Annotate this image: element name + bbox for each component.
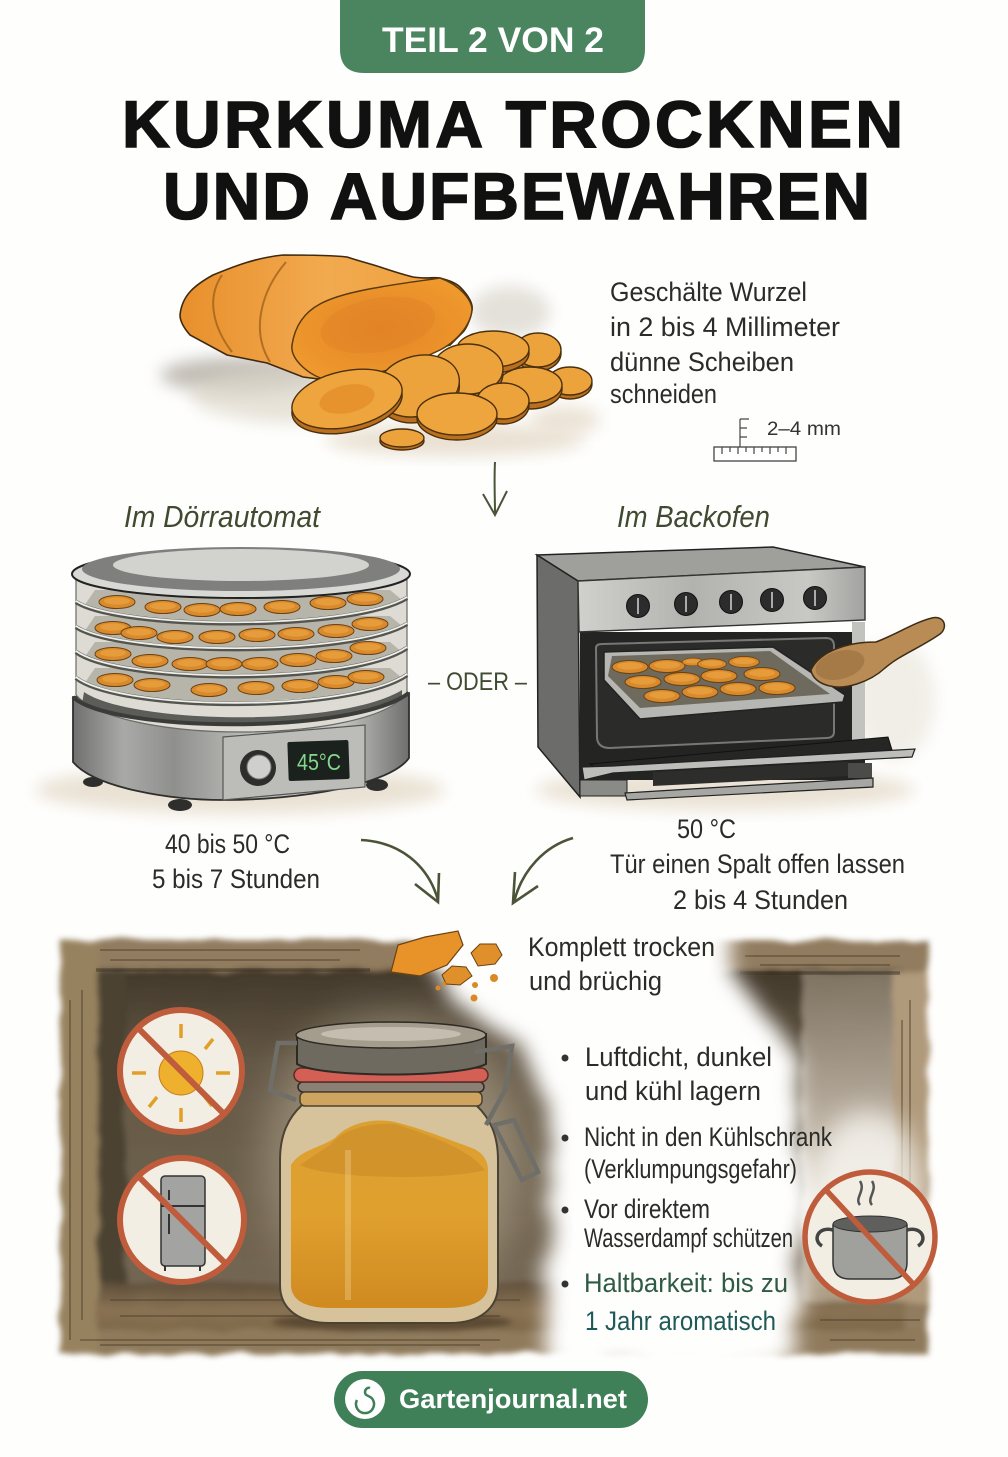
icon: ruler 2–4 mm: 2–4 mm: [767, 419, 841, 440]
lid: [72, 547, 410, 598]
steel base: [73, 693, 409, 800]
text: storage tips: und kühl lagern: [585, 1076, 761, 1106]
icon: no sunlight: [120, 1010, 242, 1132]
arrow: dehydrator to storage: [361, 840, 439, 902]
heading: dehydrator: Im Dörrautomat: [124, 499, 321, 534]
illustration: turmeric root with slices: [160, 255, 600, 456]
text: dehydrator settings: [152, 829, 320, 894]
white wash right: [813, 1110, 923, 1270]
text: storage tips: Wasserdampf schützen: [584, 1223, 793, 1253]
icon: no refrigerator: [120, 1158, 244, 1282]
control panel: 45°C: [297, 749, 341, 775]
root shadow washes: [160, 286, 600, 456]
transparent trays: [76, 580, 407, 732]
oven left side: [537, 555, 580, 797]
text: oven settings: [610, 814, 905, 915]
oven top: [537, 547, 865, 581]
glow behind jar: [265, 1015, 525, 1305]
feet: [83, 777, 388, 811]
text: oven settings: 2 bis 4 Stunden: [673, 885, 848, 915]
text: storage tips: Vor direktem: [584, 1194, 710, 1224]
wooden spoon: [811, 618, 944, 687]
shelf wood structure: [60, 940, 928, 1354]
baking tray: [604, 647, 845, 719]
text: oven settings: Tür einen Spalt offen lassen: [610, 849, 905, 879]
panel: storage shelf: [60, 905, 928, 1375]
title: [122, 87, 903, 233]
text: slicing instruction: Geschälte Wurzel: [610, 277, 807, 307]
wood grain: [70, 950, 920, 1345]
text: storage tips: Nicht in den Kühlschrank: [584, 1122, 832, 1152]
title: UND AUFBEWAHREN: [163, 159, 870, 233]
tray rims: [73, 597, 409, 724]
illustration: jar with turmeric powder: [270, 1022, 538, 1331]
powder: [291, 1121, 488, 1308]
badge: part 2 of 2: TEIL 2 VON 2: [382, 21, 604, 60]
badge: website: Gartenjournal.net: [399, 1384, 627, 1414]
text: slicing instruction: schneiden: [610, 379, 717, 409]
icon: ruler 2–4 mm: [714, 419, 841, 461]
text: slicing instruction: [610, 277, 840, 409]
white wash: [392, 905, 805, 1375]
title: KURKUMA TROCKNEN: [122, 87, 903, 161]
text: oven settings: 50 °C: [677, 814, 736, 844]
illustration: oven: [535, 547, 944, 810]
tray floors: [84, 590, 402, 701]
text: slicing instruction: in 2 bis 4 Millimeter: [610, 312, 840, 342]
text: storage tips: [562, 1042, 832, 1336]
text: storage tips: (Verklumpungsgefahr): [584, 1154, 797, 1184]
label: or: – ODER –: [428, 668, 527, 696]
heading: oven: Im Backofen: [617, 499, 770, 534]
text: storage tips: Luftdicht, dunkel: [585, 1042, 772, 1072]
lid: [296, 1022, 486, 1074]
text: dehydrator settings: 5 bis 7 Stunden: [152, 864, 320, 894]
jar rings: [294, 1068, 488, 1106]
arrow: oven to storage: [513, 838, 573, 903]
control panel: [578, 567, 865, 632]
clasp wires: [270, 1043, 538, 1180]
control panel: [223, 725, 365, 800]
open door: [580, 737, 915, 800]
text: storage tips: Haltbarkeit: bis zu: [584, 1268, 788, 1298]
back slices: [286, 331, 592, 450]
badge: part 2 of 2: [340, 0, 645, 73]
text: dehydrator settings: 40 bis 50 °C: [165, 829, 290, 859]
text: completely dry: [528, 932, 715, 996]
badge: website: [334, 1371, 648, 1428]
text: storage tips: 1 Jahr aromatisch: [585, 1306, 776, 1336]
text: completely dry: Komplett trocken: [528, 932, 715, 962]
text: completely dry: und brüchig: [529, 966, 662, 996]
oven window: [596, 638, 834, 748]
arrow: down from root: [483, 462, 507, 515]
illustration: food dehydrator: [35, 547, 445, 814]
icon: turmeric pieces: [391, 931, 502, 1002]
oven bottom body: [580, 632, 865, 780]
turmeric chips on trays: [95, 592, 388, 696]
right pillar: [852, 622, 865, 740]
icon: no steam: [805, 1172, 935, 1302]
text: slicing instruction: dünne Scheiben: [610, 347, 794, 377]
glass body: [280, 1105, 498, 1323]
